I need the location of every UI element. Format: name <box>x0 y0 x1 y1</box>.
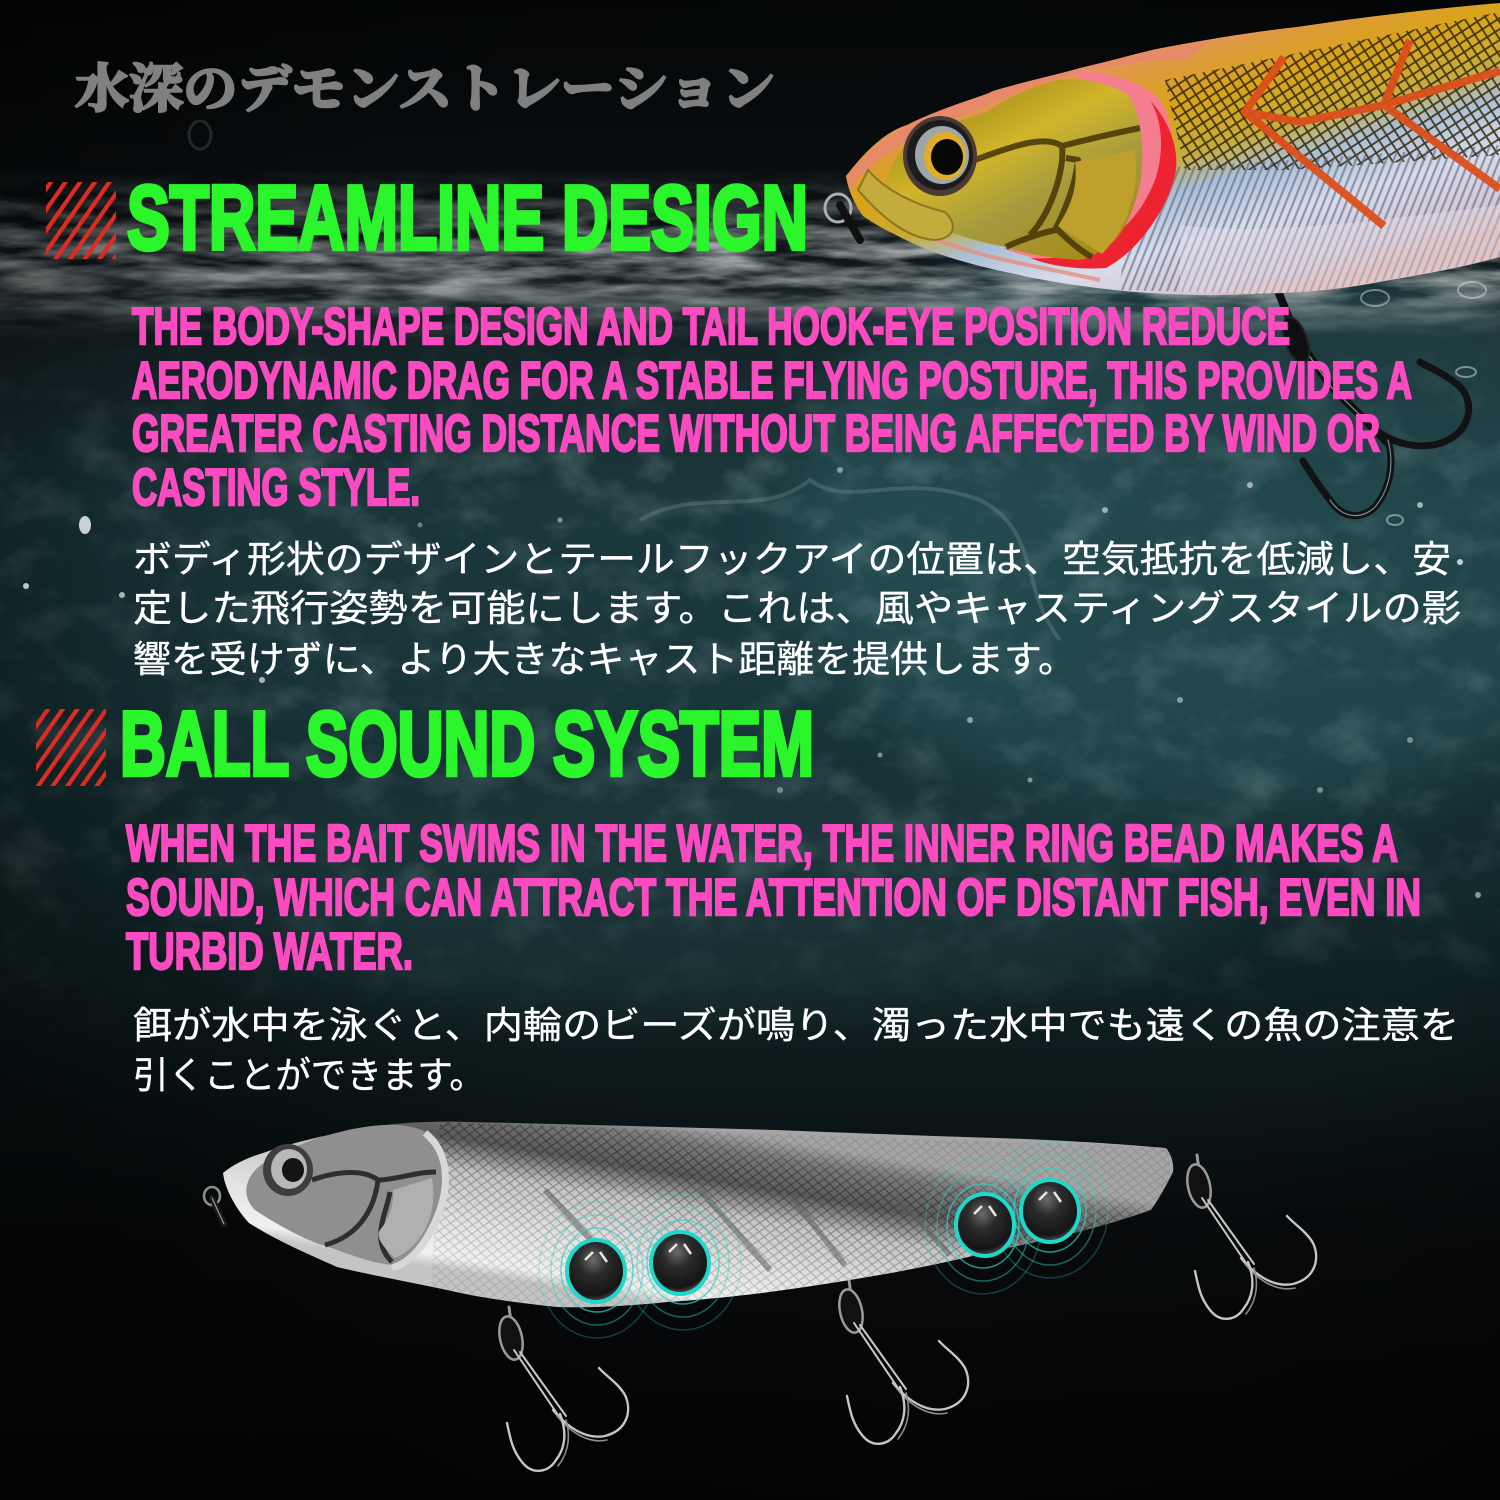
english text block: ball sound system: TURBID WATER. <box>126 923 413 981</box>
japanese text block: streamline design: ボディ形状のデザインとテールフックアイの位置は、空気抵抗を低減し、安 <box>133 539 1451 580</box>
hook on orange lure <box>1277 291 1469 516</box>
japanese text block: ball sound system <box>133 1005 1459 1096</box>
sound waves around balls <box>539 1142 1108 1338</box>
heading: ball sound system: BALL SOUND SYSTEM <box>120 694 814 795</box>
silver lure head <box>246 1125 445 1268</box>
rattle ball four <box>1021 1180 1079 1242</box>
heading: streamline design: STREAMLINE DESIGN <box>127 168 808 269</box>
rattle ball three <box>956 1194 1014 1256</box>
lure head plate <box>858 72 1176 269</box>
hatch mark: streamline design <box>46 182 116 259</box>
english text block: streamline design: CASTING STYLE. <box>132 459 420 517</box>
water bubbles <box>23 121 1486 898</box>
japanese text block: streamline design: 定した飛行姿勢を可能にします。これは、風やキャスティングスタイルの影 <box>133 588 1461 629</box>
rattle ball two <box>651 1232 709 1294</box>
rattle ball one <box>567 1240 625 1302</box>
title: depth demonstration: 水深のデモンストレーション <box>75 47 775 122</box>
hooks of silver lure <box>496 1155 1316 1471</box>
japanese text block: streamline design <box>133 539 1461 680</box>
orange salmon lure <box>846 3 1500 295</box>
hatch mark: ball sound system <box>36 709 106 786</box>
nose ring <box>825 194 860 240</box>
english text block: ball sound system <box>126 815 1421 981</box>
silver lure <box>223 1122 1173 1310</box>
japanese text block: ball sound system: 引くことができます。 <box>133 1055 485 1096</box>
lure eye <box>903 116 977 196</box>
japanese text block: streamline design: 響を受けずに、より大きなキャスト距離を提供します。 <box>133 639 1076 680</box>
japanese text block: ball sound system: 餌が水中を泳ぐと、内輪のビーズが鳴り、濁った水中でも遠くの魚の注意を <box>133 1005 1459 1046</box>
english text block: streamline design <box>132 298 1412 517</box>
nose ring of silver lure <box>204 1187 224 1224</box>
